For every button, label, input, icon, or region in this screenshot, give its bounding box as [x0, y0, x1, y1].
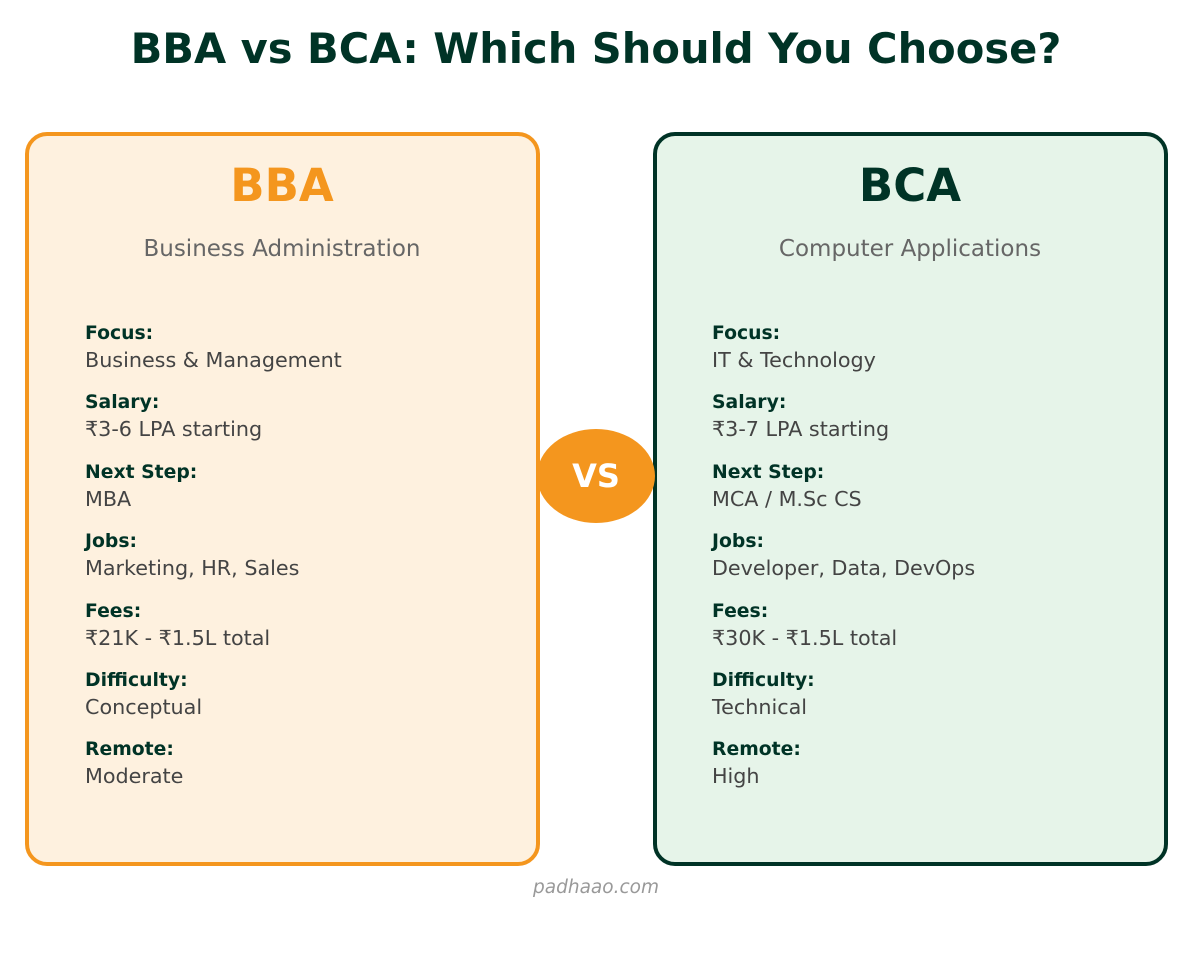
- BBA details: ₹21K - ₹1.5L total: [85, 626, 270, 650]
- BCA details: Developer, Data, DevOps: [712, 556, 975, 580]
- panel: BCA: [655, 134, 1166, 864]
- BCA details: High: [712, 764, 760, 788]
- BBA details: Difficulty:: [85, 670, 188, 691]
- heading: BCA: BCA: [859, 159, 961, 212]
- BCA details: ₹3-7 LPA starting: [712, 417, 889, 441]
- BBA details: Fees:: [85, 601, 141, 622]
- BBA details: MBA: [85, 487, 131, 511]
- BCA details: IT & Technology: [712, 348, 876, 372]
- BBA details: Next Step:: [85, 462, 197, 483]
- subtitle: BCA: Computer Applications: [779, 236, 1041, 262]
- BBA details: Salary:: [85, 392, 159, 413]
- BBA details: Remote:: [85, 739, 174, 760]
- BCA details: [710, 323, 975, 788]
- BBA details: Marketing, HR, Sales: [85, 556, 299, 580]
- BBA details: Jobs:: [83, 531, 137, 552]
- watermark: padhaao.com: [532, 877, 659, 898]
- BCA details: ₹30K - ₹1.5L total: [712, 626, 897, 650]
- BBA details: Conceptual: [85, 695, 202, 719]
- BCA details: Fees:: [712, 601, 768, 622]
- BCA details: Jobs:: [710, 531, 764, 552]
- VS badge: [537, 429, 655, 523]
- BCA details: Technical: [711, 695, 807, 719]
- heading: BBA: BBA: [230, 159, 334, 212]
- BCA details: Difficulty:: [712, 670, 815, 691]
- BBA details: [83, 323, 342, 788]
- subtitle: BBA: Business Administration: [143, 236, 421, 262]
- BBA details: ₹3-6 LPA starting: [85, 417, 262, 441]
- title: BBA vs BCA: Which Should You Choose?: [131, 24, 1061, 73]
- panel: BBA: [27, 134, 538, 864]
- VS badge: VS: [572, 457, 620, 495]
- BCA details: Focus:: [712, 323, 780, 344]
- BCA details: MCA / M.Sc CS: [712, 487, 862, 511]
- BBA details: Focus:: [85, 323, 153, 344]
- BCA details: Salary:: [712, 392, 786, 413]
- BBA details: Business & Management: [85, 348, 342, 372]
- BBA details: Moderate: [85, 764, 183, 788]
- BCA details: Next Step:: [712, 462, 824, 483]
- BCA details: Remote:: [712, 739, 801, 760]
